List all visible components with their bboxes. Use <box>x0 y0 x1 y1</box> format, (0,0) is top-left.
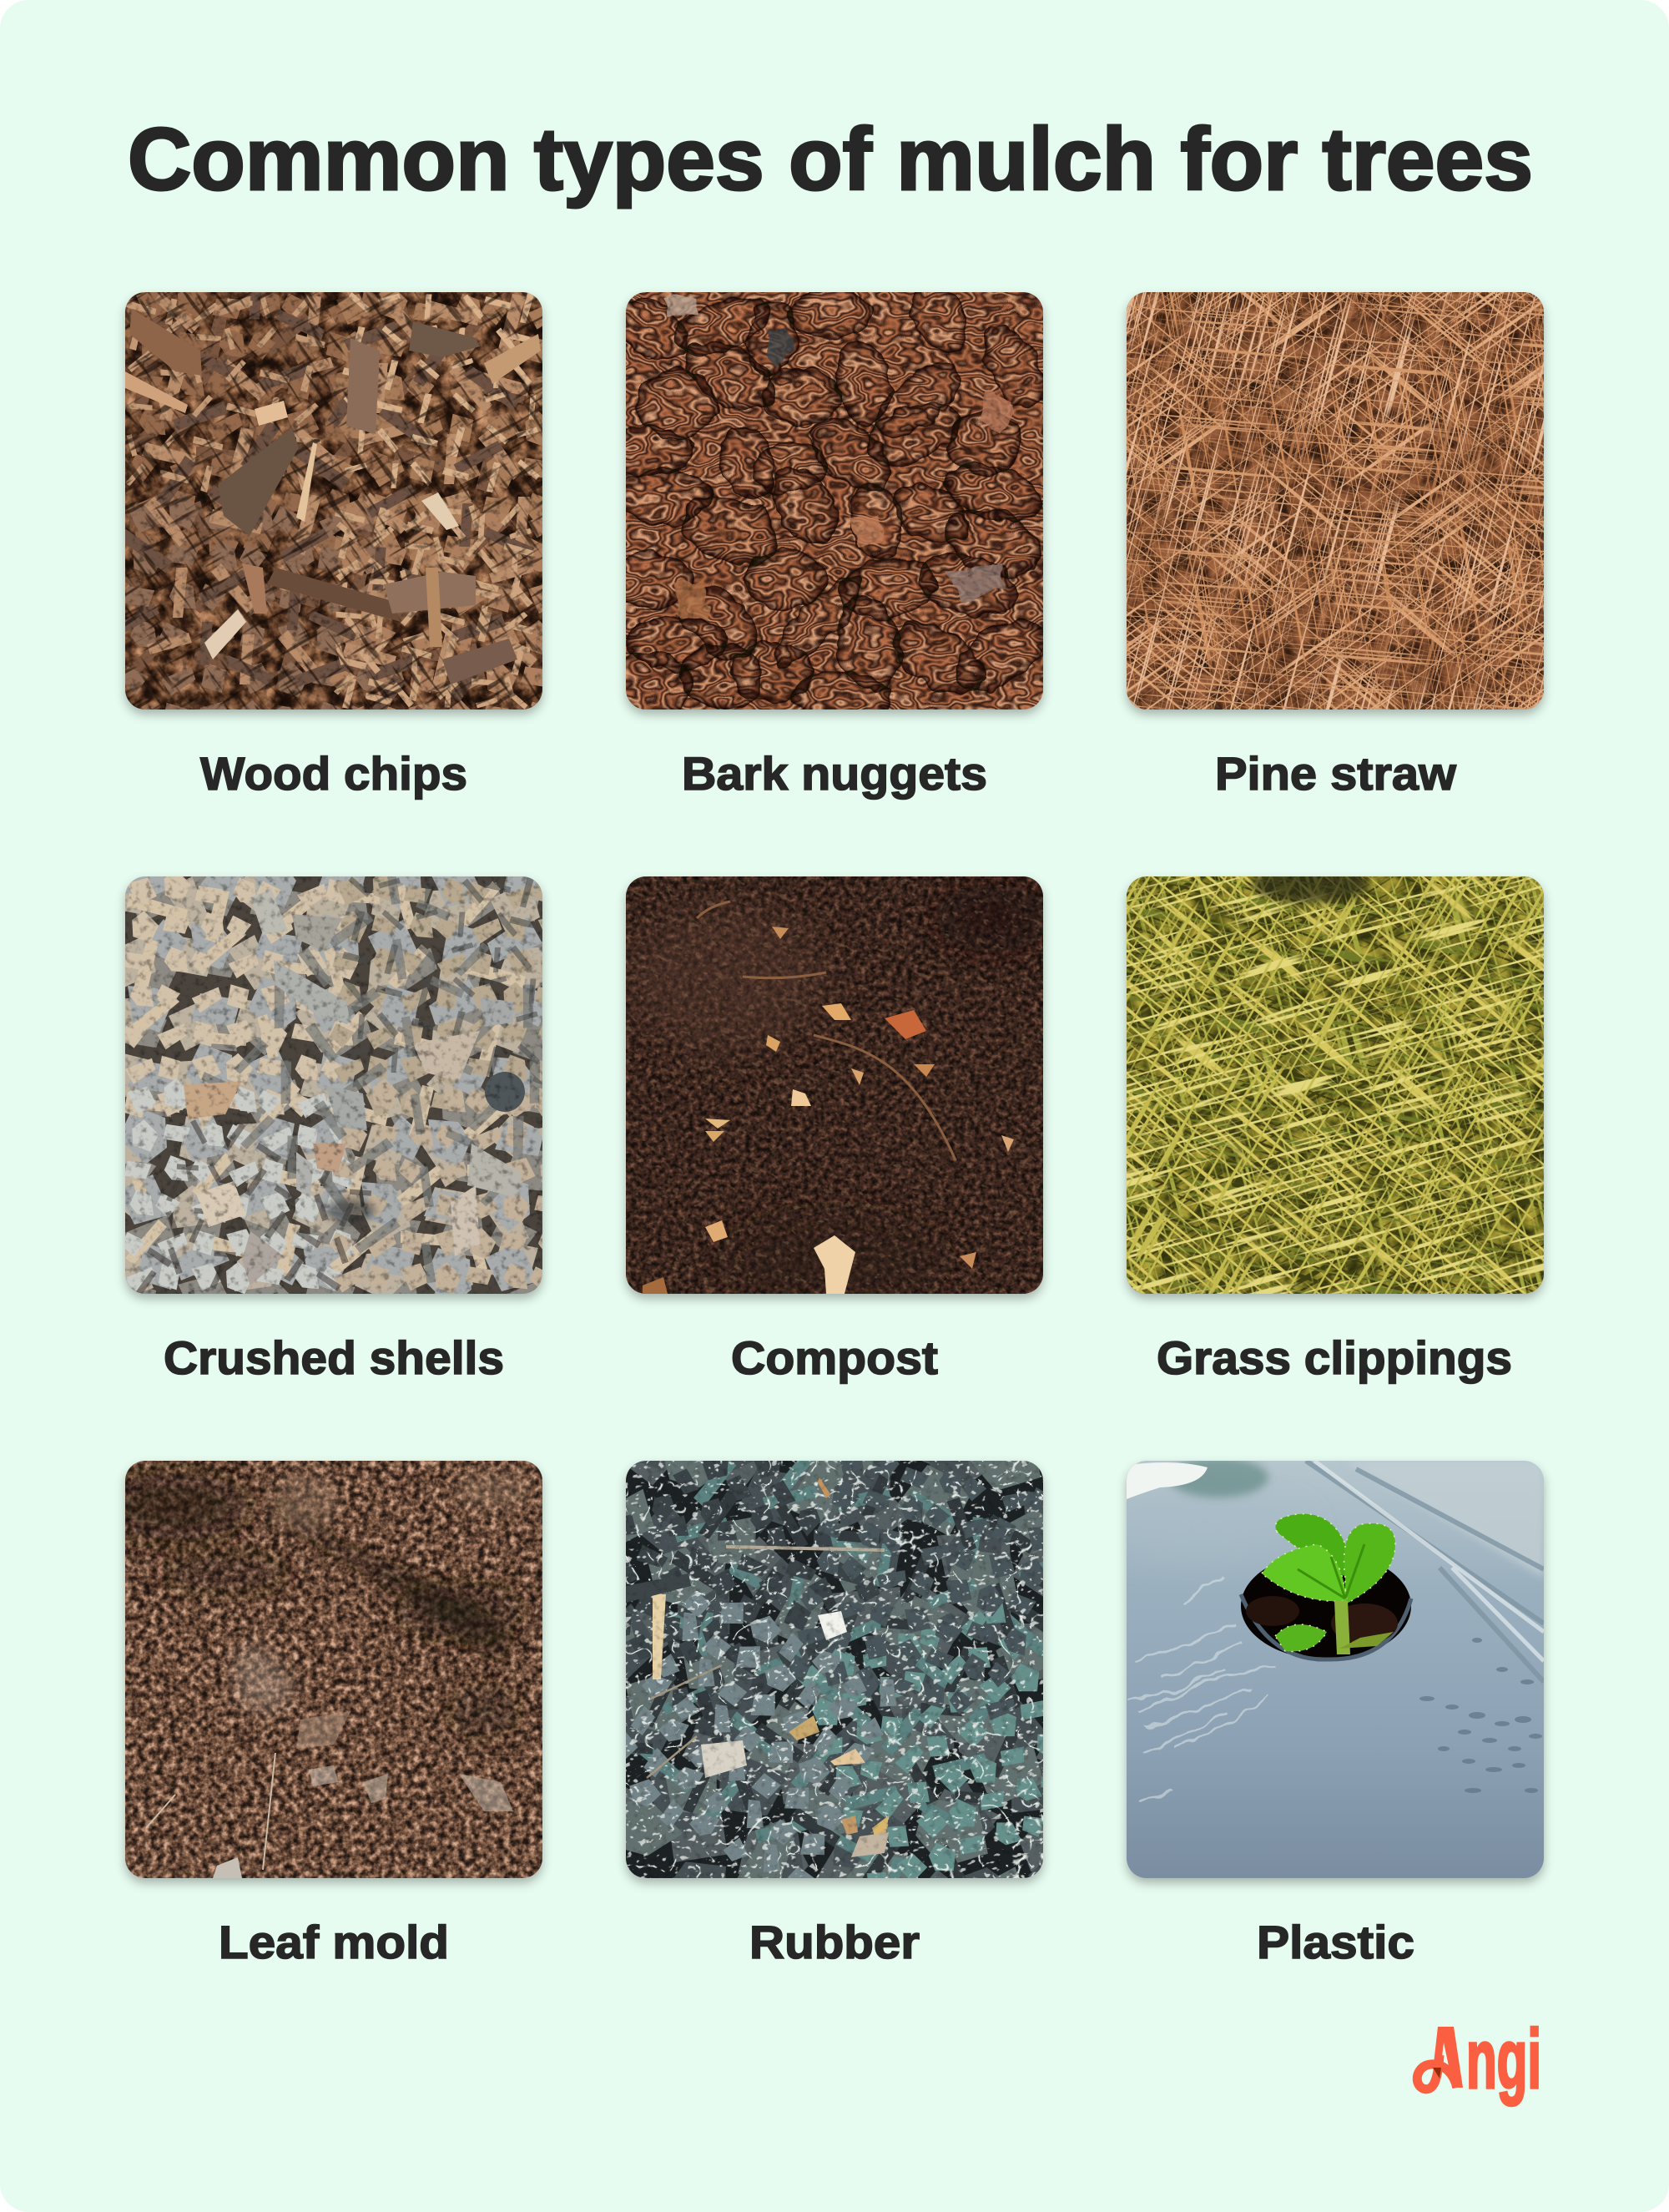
photo: leaf mold <box>100 1461 542 1878</box>
panel: crushed shells <box>119 876 548 1376</box>
label: pine straw: Pine straw <box>1215 747 1456 800</box>
photo: rubber <box>626 1461 1043 1878</box>
panel: leaf mold <box>100 1461 542 1968</box>
label: leaf mold: Leaf mold <box>219 1916 449 1968</box>
seedling leaves <box>1262 1514 1395 1654</box>
seedling hole <box>1241 1553 1411 1659</box>
photo: wood chips <box>125 292 542 710</box>
label: compost: Compost <box>731 1331 938 1384</box>
panel: compost <box>620 876 1049 1384</box>
panel: plastic <box>1127 1457 1544 1968</box>
photo: grass clippings <box>1127 876 1544 1294</box>
label: wood chips: Wood chips <box>200 747 467 800</box>
photo: plastic mulch with seedling <box>1127 1457 1544 1878</box>
photo: compost <box>626 876 1043 1294</box>
panel: wood chips <box>119 291 548 800</box>
panel: pine straw <box>1121 291 1550 791</box>
title: Common types of mulch for trees <box>128 110 1533 209</box>
logo: Angi <box>1417 2013 1541 2106</box>
panel: rubber <box>620 1460 1049 1960</box>
photo: pine straw <box>1127 292 1544 710</box>
label: plastic: Plastic <box>1257 1916 1414 1968</box>
label: rubber: Rubber <box>749 1916 920 1968</box>
label: crushed shells: Crushed shells <box>164 1331 504 1384</box>
panel: grass clippings <box>1121 876 1550 1384</box>
logo: Angi: ngi <box>1466 2013 1541 2106</box>
photo: bark nuggets <box>626 292 1043 710</box>
panel: bark nuggets <box>602 273 1059 800</box>
label: grass clippings: Grass clippings <box>1157 1331 1512 1384</box>
photo: crushed shells <box>125 876 542 1294</box>
label: bark nuggets: Bark nuggets <box>682 747 987 800</box>
